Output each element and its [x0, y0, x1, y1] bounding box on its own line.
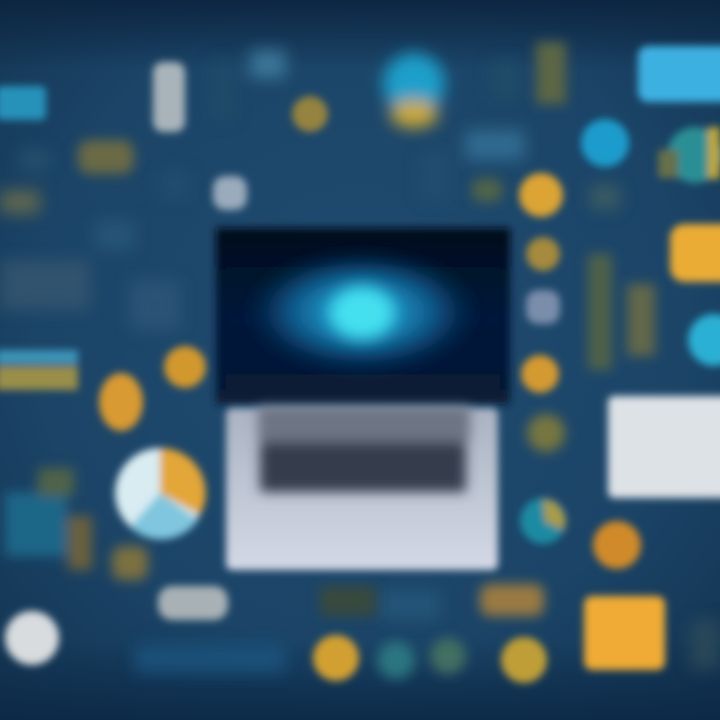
icon: cyan dot right [688, 314, 720, 366]
icon: small dots bottom [377, 641, 415, 679]
icon: teal and yellow globe [520, 498, 566, 544]
laptop screen [216, 228, 510, 404]
pie chart [115, 448, 206, 539]
icon: striped bars left [0, 350, 78, 364]
keyboard [258, 406, 470, 492]
icon: multicolour badge [667, 127, 720, 183]
soft muted icons [5, 42, 655, 679]
laptop base [226, 408, 498, 570]
icon: yellow square [584, 596, 665, 670]
icon: cyan rounded panel [638, 46, 720, 102]
icon: white card [608, 396, 720, 498]
icon: white bar [153, 62, 185, 132]
left column icons [0, 62, 359, 681]
icon: orange chip [112, 546, 148, 580]
icon: bottom chip row [480, 584, 544, 616]
icon: orange dot lower [593, 521, 641, 569]
icon: orange oval [99, 373, 143, 431]
icon: cyan tab top left [0, 86, 46, 120]
icon: orange dot column [519, 173, 563, 217]
icon: olive column [536, 42, 566, 104]
right column icons [501, 46, 720, 683]
icon: blue box lower left [5, 492, 67, 556]
icon: muted dot column [527, 414, 565, 452]
icon: cyan dot [581, 119, 629, 167]
icon: white circle bottom left [5, 611, 59, 665]
icon: white pill bottom [158, 586, 228, 620]
icon: yellow dot bottom [313, 635, 359, 681]
screen glow [244, 250, 480, 374]
icon: olive pill [78, 140, 134, 174]
top centre cyan and yellow badge [383, 53, 445, 128]
icon: yellow pill right [670, 224, 720, 282]
glowing eye core [330, 287, 394, 339]
icon: orange dot [164, 346, 206, 388]
icon: yellow dot top [292, 96, 328, 132]
icon: olive tag lower left [38, 468, 74, 496]
icon: yellow dot bottom right [501, 637, 547, 683]
icon: grey square [213, 176, 247, 210]
icon: muted dot [472, 178, 502, 202]
icon: olive bars [588, 254, 612, 370]
laptop [216, 228, 510, 570]
